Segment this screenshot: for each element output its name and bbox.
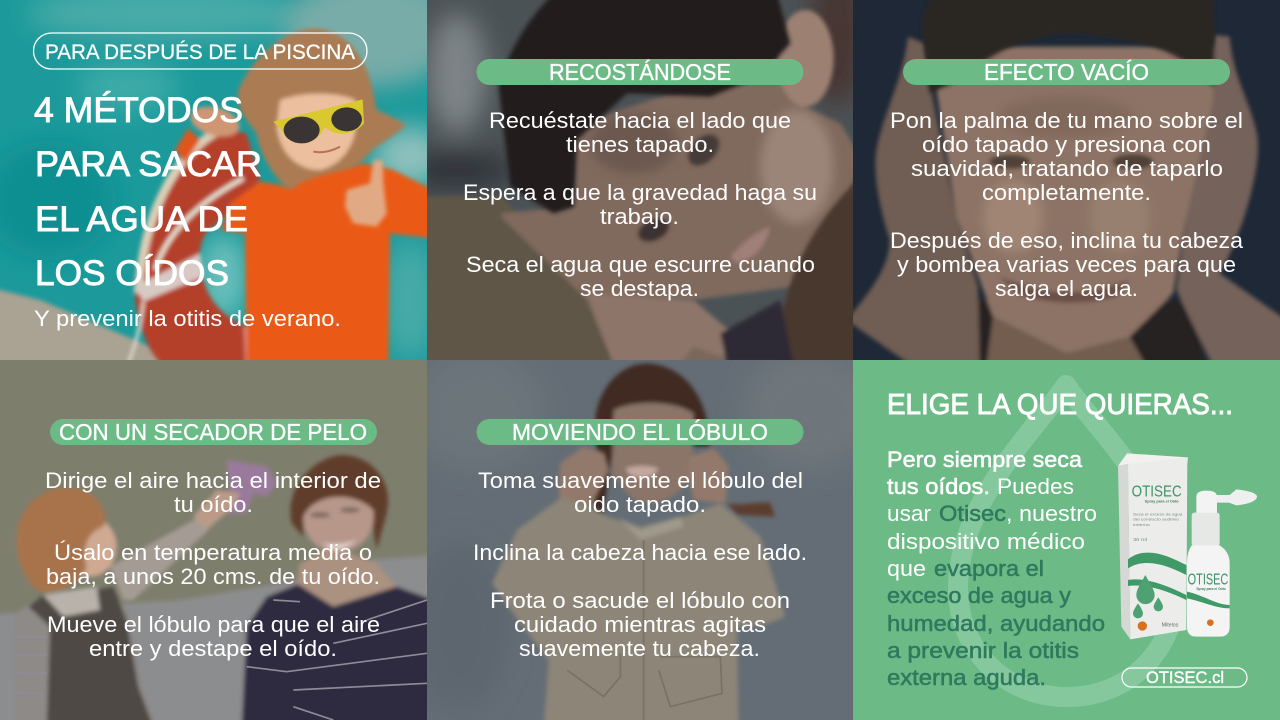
closing body text: humedad, ayudando	[887, 611, 1105, 636]
closing body text: que	[887, 556, 926, 581]
closing body text: Otisec	[939, 501, 1006, 526]
title: LOS OÍDOS	[35, 253, 229, 293]
body text	[890, 108, 1244, 301]
closing body text: , nuestro	[1006, 501, 1097, 526]
product box: del conducto auditivo	[1133, 517, 1180, 522]
body text: tu oído.	[174, 492, 253, 517]
website pill: OTISEC.cl	[1146, 668, 1224, 687]
closing body text: externa aguda.	[887, 665, 1046, 690]
body text: salga el agua.	[995, 276, 1138, 301]
product box: 30 ml	[1133, 537, 1147, 542]
closing body text: usar	[887, 501, 931, 526]
spray bottle	[1187, 489, 1257, 637]
body text: Toma suavemente el lóbulo del	[478, 468, 803, 493]
spray bottle: OTISEC	[1188, 572, 1228, 589]
heading pill	[903, 59, 1230, 85]
body text: Después de eso, inclina tu cabeza	[890, 228, 1244, 253]
body text: Pon la palma de tu mano sobre el	[890, 108, 1243, 133]
photo: child drying woman's hair	[0, 360, 427, 720]
body text: Úsalo en temperatura media o	[54, 540, 372, 565]
closing body text	[887, 447, 1105, 690]
body text: oido tapado.	[574, 492, 706, 517]
product box: externo	[1133, 522, 1151, 527]
closing body text: exceso de agua y	[887, 583, 1072, 608]
closing heading: ELIGE LA QUE QUIERAS...	[887, 389, 1233, 421]
panel: intro	[0, 0, 460, 373]
panel: recostándose	[400, 0, 864, 373]
product: Otisec box and spray	[1118, 453, 1257, 640]
body text	[45, 468, 381, 661]
body text: suavemente tu cabeza.	[519, 636, 760, 661]
heading pill: MOVIENDO EL LÓBULO	[512, 419, 768, 445]
panel: elige la que quieras	[853, 360, 1280, 720]
title: 4 MÉTODOS	[34, 90, 243, 130]
photo: child with lifebuoy	[0, 0, 427, 360]
closing body text: Puedes	[997, 474, 1074, 499]
panel: moviendo el lóbulo	[410, 350, 877, 720]
body text: y bombea varias veces para que	[897, 252, 1236, 277]
product box: Seca el exceso de agua	[1133, 511, 1183, 516]
body text	[473, 468, 807, 661]
title	[34, 90, 262, 293]
body text: Frota o sacude el lóbulo con	[490, 588, 790, 613]
closing body text: tus oídos.	[887, 474, 990, 499]
body text: cuidado mientras agitas	[514, 612, 766, 637]
subtitle text: Y prevenir la otitis de verano.	[34, 306, 341, 331]
closing body text: evapora el	[934, 556, 1044, 581]
body text: Espera a que la gravedad haga su	[463, 180, 817, 205]
spray bottle: Spray para el Oído	[1196, 587, 1226, 591]
panel: efecto vacío	[846, 0, 1280, 367]
product box: OTISEC	[1132, 484, 1182, 501]
photo: woman holding earlobes	[427, 360, 853, 720]
body text: Mueve el lóbulo para que el aire	[47, 612, 380, 637]
body text: baja, a unos 20 cms. de tu oído.	[46, 564, 380, 589]
body text: entre y destape el oído.	[89, 636, 337, 661]
closing body text: dispositivo médico	[887, 529, 1085, 554]
heading pill	[476, 59, 804, 85]
product box: Spray para el Oído	[1145, 498, 1179, 503]
body text: oído tapado y presiona con	[922, 132, 1211, 157]
body text: Dirige el aire hacia el interior de	[45, 468, 381, 493]
body text: trabajo.	[600, 204, 679, 229]
body text: suavidad, tratando de taparlo	[911, 156, 1223, 181]
product box: Mitelos	[1162, 623, 1178, 629]
heading pill: EFECTO VACÍO	[984, 59, 1149, 85]
heading pill: RECOSTÁNDOSE	[549, 59, 731, 85]
icon: water drop outline	[958, 385, 1176, 697]
closing body text: a prevenir la otitis	[887, 638, 1079, 663]
product box	[1118, 453, 1188, 639]
body text: Seca el agua que escurre cuando	[466, 252, 815, 277]
body text: tienes tapado.	[566, 132, 714, 157]
subtitle pill	[34, 33, 367, 69]
panel: secador de pelo	[0, 353, 440, 720]
website pill	[1122, 668, 1247, 687]
subtitle pill: PARA DESPUÉS DE LA PISCINA	[45, 39, 356, 64]
photo: child lying down	[427, 0, 853, 360]
body text	[463, 108, 817, 301]
body text: Inclina la cabeza hacia ese lado.	[473, 540, 807, 565]
photo: woman covering ears	[853, 0, 1280, 360]
body text: se destapa.	[580, 276, 699, 301]
body text: Recuéstate hacia el lado que	[489, 108, 791, 133]
body text: completamente.	[982, 180, 1151, 205]
heading pill: CON UN SECADOR DE PELO	[59, 419, 367, 445]
title: PARA SACAR	[35, 144, 262, 184]
title: EL AGUA DE	[35, 199, 248, 239]
closing body text: Pero siempre seca	[887, 447, 1082, 472]
